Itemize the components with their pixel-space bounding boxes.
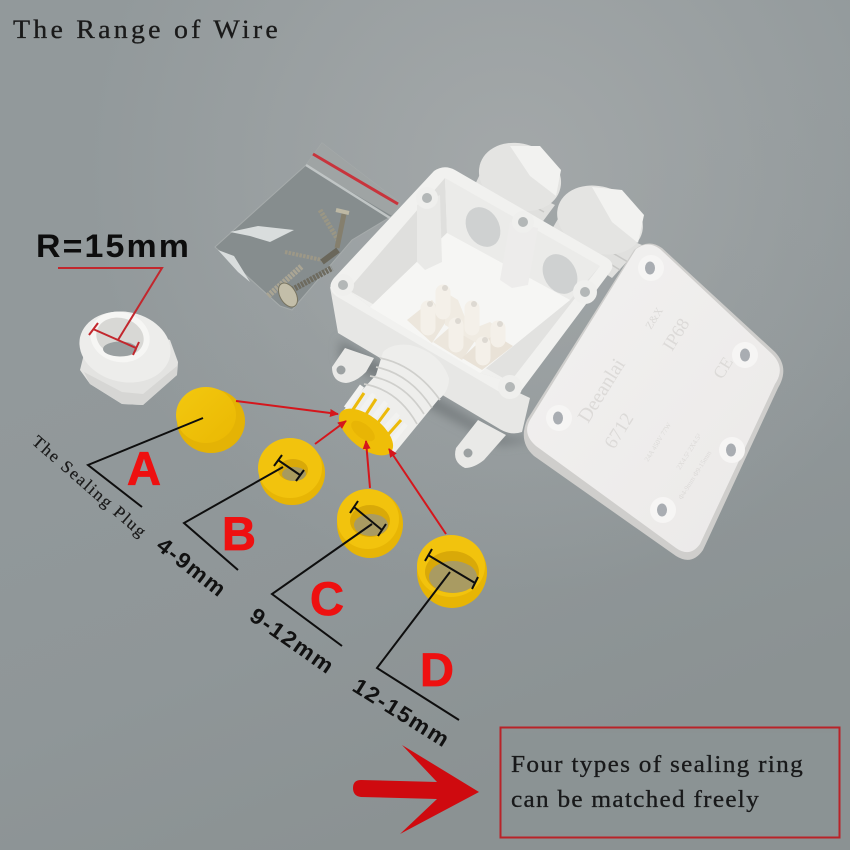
red arrows to gland xyxy=(236,401,446,534)
right inner wall xyxy=(480,266,600,382)
leader lines xyxy=(88,418,478,720)
terminal block xyxy=(407,285,513,370)
label B: B xyxy=(222,507,256,560)
box rim xyxy=(330,167,612,396)
internal screw posts xyxy=(417,195,442,270)
R=15mm label: R=15mm xyxy=(36,228,191,264)
callout box xyxy=(500,728,840,838)
box front walls xyxy=(330,287,530,433)
label C: C xyxy=(310,572,344,625)
screws xyxy=(268,210,349,310)
embossed lid text: CE xyxy=(709,354,737,382)
embossed lid text xyxy=(574,305,737,501)
yellow ring C xyxy=(337,489,403,558)
12-15mm label: 12-15mm xyxy=(348,673,455,753)
big red arrow xyxy=(353,745,479,834)
embossed lid text: 6712 xyxy=(600,409,638,453)
embossed lid text: 24A 450V 77W xyxy=(643,421,673,463)
mounting lugs xyxy=(332,348,374,383)
The Sealing Plug label: The Sealing Plug xyxy=(28,432,151,542)
4-9mm label: 4-9mm xyxy=(152,532,232,602)
embossed lid text: 2X4.5² 2X4.5² xyxy=(675,432,703,471)
lower inner wall xyxy=(348,290,510,382)
R dimension line xyxy=(58,268,162,355)
label A: A xyxy=(127,442,161,495)
embossed lid text: Z&X xyxy=(643,305,666,332)
callout text: can be matched freely xyxy=(511,787,760,813)
junction box xyxy=(330,167,612,468)
yellow face xyxy=(331,400,401,464)
gland nut (R=15mm) xyxy=(58,268,178,405)
cable holes xyxy=(459,201,507,253)
left inner wall xyxy=(348,178,447,307)
yellow ring B xyxy=(258,438,325,505)
label D: D xyxy=(420,643,454,696)
box shadow xyxy=(340,340,540,445)
back inner wall xyxy=(445,178,600,300)
embossed lid text: IP68 xyxy=(658,315,693,354)
rear cable glands xyxy=(469,132,653,278)
embossed lid text: Deeanlai xyxy=(574,354,630,427)
box floor xyxy=(370,233,570,373)
embossed lid text: Φ4-9mm Φ9-15mm xyxy=(677,449,714,501)
yellow ring D xyxy=(417,535,487,608)
callout text: Four types of sealing ring xyxy=(511,752,804,778)
9-12mm label: 9-12mm xyxy=(245,603,340,679)
yellow plug A xyxy=(176,387,245,453)
threaded gland with yellow face xyxy=(331,345,449,464)
bag of screws xyxy=(215,143,400,310)
title: The Range of Wire xyxy=(13,15,281,44)
callout text xyxy=(511,752,804,813)
lid xyxy=(524,243,783,560)
corner screw bosses xyxy=(332,187,597,399)
